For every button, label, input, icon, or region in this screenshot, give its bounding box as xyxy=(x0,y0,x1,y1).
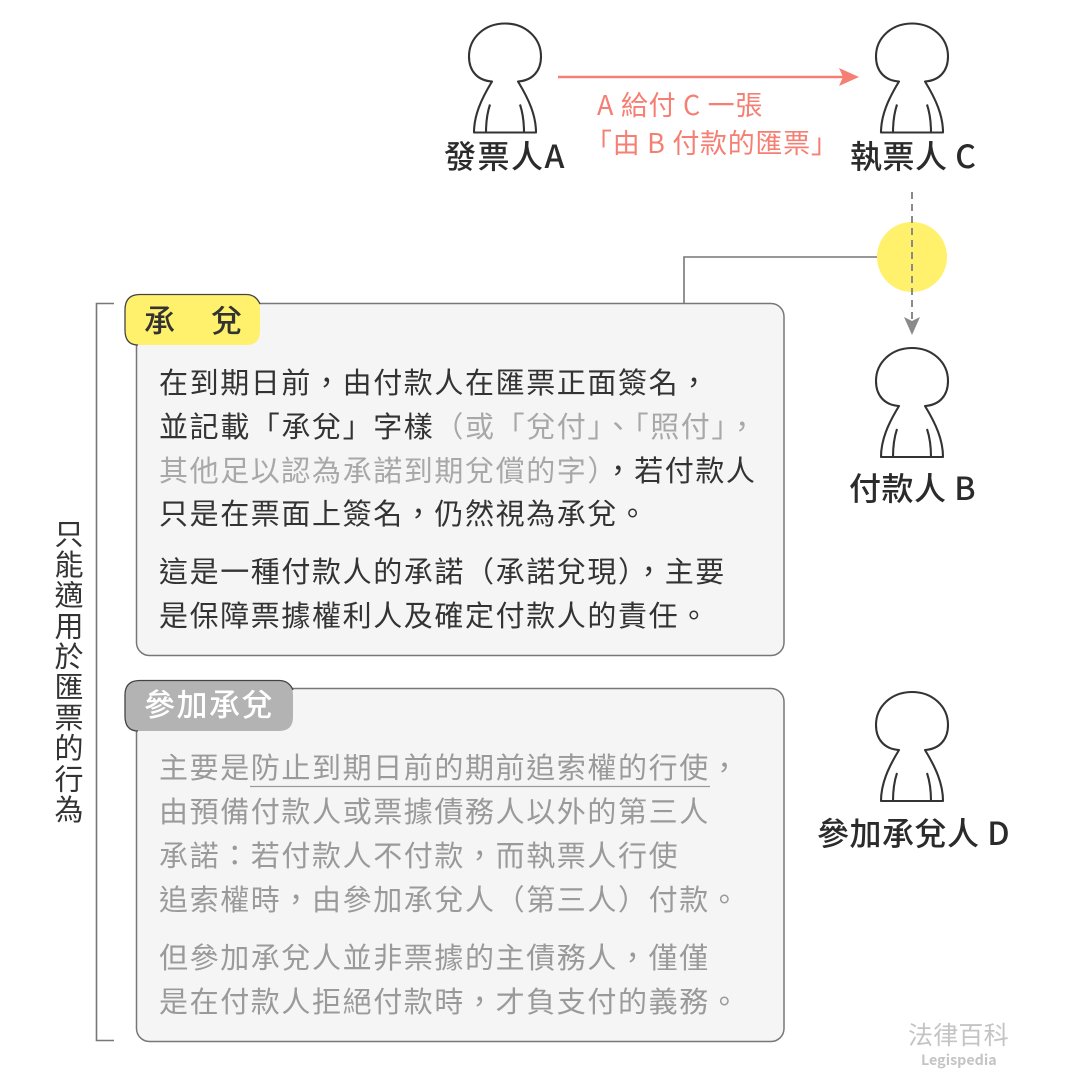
arrow: C to B dashed xyxy=(904,192,920,335)
watermark: Legispedia: 法律百科 xyxy=(908,1016,1009,1052)
panel text: acceptance: 是保障票據權利人及確定付款人的責任。 xyxy=(159,593,710,635)
label: 付款人 B: 付款人 B xyxy=(849,464,976,510)
text: A gives C a bill: A 給付 C 一張 xyxy=(597,84,763,123)
panel text: participation acceptance: 追索權時，由參加承兌人（第三人）付款。 xyxy=(159,877,740,919)
label: 發票人A: 發票人A xyxy=(444,132,566,178)
icon: person B xyxy=(876,348,948,457)
watermark: Legispedia xyxy=(908,1016,1009,1070)
connector line to panel xyxy=(684,257,878,304)
watermark: Legispedia: Legispedia xyxy=(921,1049,997,1070)
icon: person A xyxy=(469,24,541,132)
yellow circle marker xyxy=(877,222,947,292)
panel text: acceptance: 並記載「承兌」字樣（或「兌付」、「照付」， xyxy=(159,404,758,446)
tag: 參加承兌 xyxy=(125,680,293,731)
label: 參加承兌人 D: 參加承兌人 D xyxy=(817,809,1010,855)
panel text: participation acceptance: 承諾：若付款人不付款，而執票人行使 xyxy=(159,833,679,875)
label: 執票人 C: 執票人 C xyxy=(850,132,976,178)
icon: person C xyxy=(876,24,948,132)
panel text: acceptance: 在到期日前，由付款人在匯票正面簽名， xyxy=(159,360,710,402)
panel text: acceptance: 這是一種付款人的承諾（承諾兌現），主要 xyxy=(159,549,726,591)
panel: acceptance xyxy=(125,294,784,656)
panel text: acceptance: 只是在票面上簽名，仍然視為承兌。 xyxy=(159,491,649,533)
tag: 承兌: 承 兌 xyxy=(144,296,244,341)
text: A gives C a bill: 「由 B 付款的匯票」 xyxy=(585,122,839,161)
panel text: participation acceptance: 主要是防止到期日前的期前追索權的行使， xyxy=(159,745,740,787)
icon: person D xyxy=(876,692,948,801)
panel: participation acceptance xyxy=(125,680,784,1042)
tag: 承兌 xyxy=(125,294,260,345)
panel text: participation acceptance xyxy=(159,745,740,1021)
arrow: A to C xyxy=(558,68,859,86)
vertical label: 只能適用於匯票的行為 xyxy=(48,519,90,825)
panel text: participation acceptance: 是在付款人拒絕付款時，才負支付的義務。 xyxy=(159,979,740,1021)
tag: 參加承兌: 參加承兌 xyxy=(144,680,274,725)
text: A gives C a bill xyxy=(585,84,839,161)
panel text: acceptance: 其他足以認為承諾到期兌償的字），若付款人 xyxy=(159,448,757,490)
panel text: participation acceptance: 但參加承兌人並非票據的主債務人，僅僅 xyxy=(159,935,710,977)
panel text: participation acceptance: 由預備付款人或票據債務人以外的第三人 xyxy=(159,789,710,831)
panel text: acceptance xyxy=(159,360,758,635)
bracket xyxy=(96,304,114,1040)
